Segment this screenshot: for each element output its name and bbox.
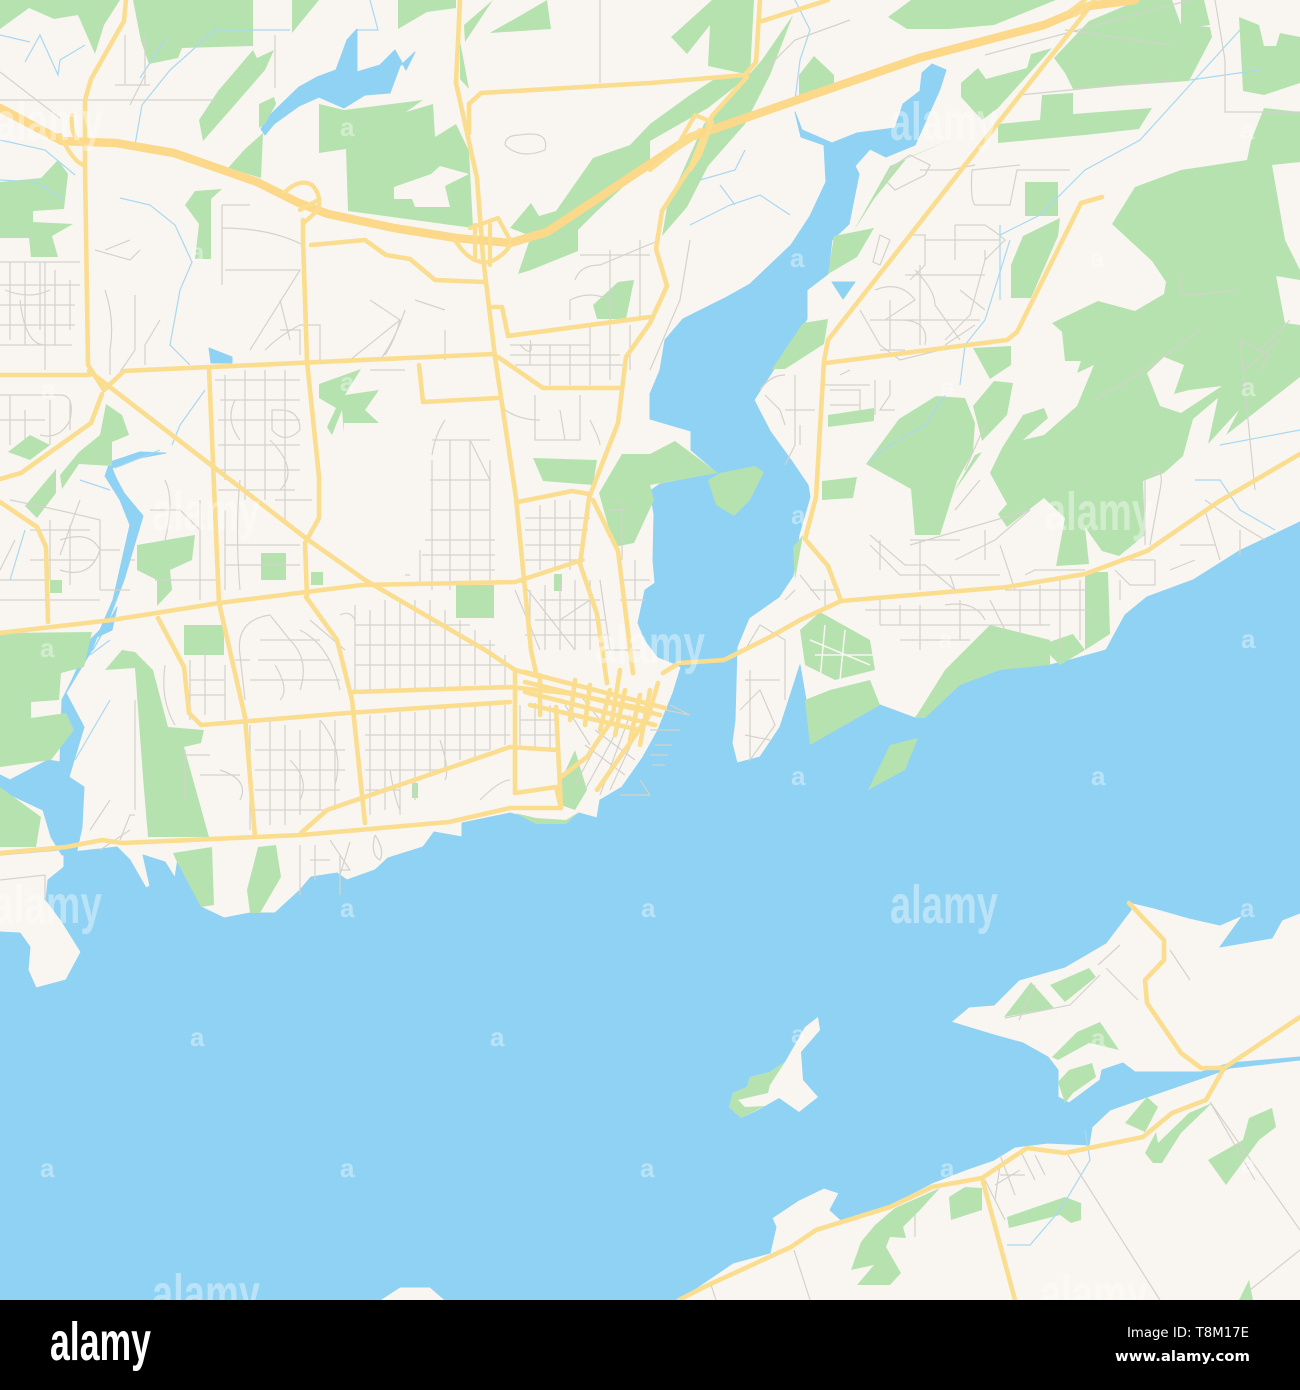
small repeated watermarks: a	[640, 1153, 655, 1183]
northwest streets	[0, 0, 600, 285]
northeast forests	[772, 0, 1300, 580]
small repeated watermarks: a	[641, 893, 656, 923]
forest clearings	[1147, 357, 1222, 413]
island forest	[729, 1062, 785, 1118]
centre streets	[265, 300, 445, 370]
small repeated watermarks: a	[1240, 115, 1255, 145]
city main roads	[0, 560, 658, 853]
small repeated watermarks: a	[791, 1019, 806, 1049]
small repeated watermarks: a	[1241, 372, 1256, 402]
watermark east forest: alamy	[1045, 482, 1153, 542]
small repeated watermarks: a	[340, 1153, 355, 1183]
small repeated watermarks: a	[40, 1153, 55, 1183]
footer bar	[0, 1300, 1300, 1390]
southeast forests	[851, 968, 1276, 1300]
west river	[0, 452, 166, 855]
small repeated watermarks: a	[791, 761, 806, 791]
watermark north bay: alamy	[890, 92, 998, 152]
small repeated watermarks: a	[40, 633, 55, 663]
website: www.alamy.com	[1115, 1349, 1250, 1365]
west side forests	[0, 404, 587, 913]
small repeated watermarks: a	[340, 893, 355, 923]
image id: Image ID: T8M17E	[1127, 1325, 1249, 1341]
north highway	[0, 0, 1135, 243]
interchanges	[60, 0, 1095, 265]
west subdivision	[0, 262, 80, 370]
small repeated watermarks: a	[490, 1022, 505, 1052]
small repeated watermarks: a	[190, 1022, 205, 1052]
small repeated watermarks: a	[938, 624, 953, 654]
far east lanes	[1095, 0, 1300, 490]
watermark city: alamy	[152, 482, 260, 542]
central north forests	[510, 0, 834, 547]
small repeated watermarks: a	[41, 374, 56, 404]
central south grid	[340, 600, 510, 690]
southeast lanes	[711, 945, 1300, 1300]
pond east of bay	[832, 282, 855, 299]
small repeated watermarks: a	[340, 112, 355, 142]
east-west arterials	[0, 240, 650, 677]
footer background	[0, 1300, 1300, 1390]
north lake	[261, 29, 415, 135]
small repeated watermarks: a	[1091, 761, 1106, 791]
watermark south right: alamy	[1040, 1264, 1148, 1324]
small repeated watermarks	[40, 112, 1256, 1183]
small repeated watermarks: a	[940, 372, 955, 402]
island land	[729, 1017, 820, 1118]
forest clearing in central forest	[394, 166, 469, 207]
watermark harbour: alamy	[595, 615, 705, 675]
small repeated watermarks: a	[1241, 624, 1256, 654]
northwest forests	[0, 0, 551, 435]
small repeated watermarks: a	[1240, 893, 1255, 923]
small repeated watermarks: a	[1090, 243, 1105, 273]
small repeated watermarks: a	[940, 1153, 955, 1183]
southwest neighbourhood	[235, 615, 345, 700]
downtown east forests	[800, 572, 1110, 790]
fort street pattern	[810, 625, 875, 680]
small repeated watermarks: a	[190, 237, 205, 267]
watermark south left: alamy	[152, 1264, 260, 1324]
bridge and east shore	[663, 8, 1300, 673]
small repeated watermarks: a	[340, 367, 355, 397]
small repeated watermarks: a	[1091, 1023, 1106, 1053]
small repeated watermarks: a	[1241, 1149, 1256, 1179]
small repeated watermarks: a	[790, 243, 805, 273]
bay island forest	[708, 466, 764, 516]
west centre streets	[215, 370, 312, 590]
island	[729, 1017, 820, 1118]
east neighbourhood	[885, 155, 1070, 205]
north-south arterials	[85, 0, 828, 837]
watermark centre lake: alamy	[890, 875, 998, 935]
peninsula and east bay streets	[740, 625, 785, 760]
small repeated watermarks: a	[791, 500, 806, 530]
downtown grid	[525, 672, 665, 745]
small pond	[209, 348, 232, 363]
alamy logo: alamy	[50, 1312, 151, 1372]
south shore roads	[679, 903, 1300, 1300]
